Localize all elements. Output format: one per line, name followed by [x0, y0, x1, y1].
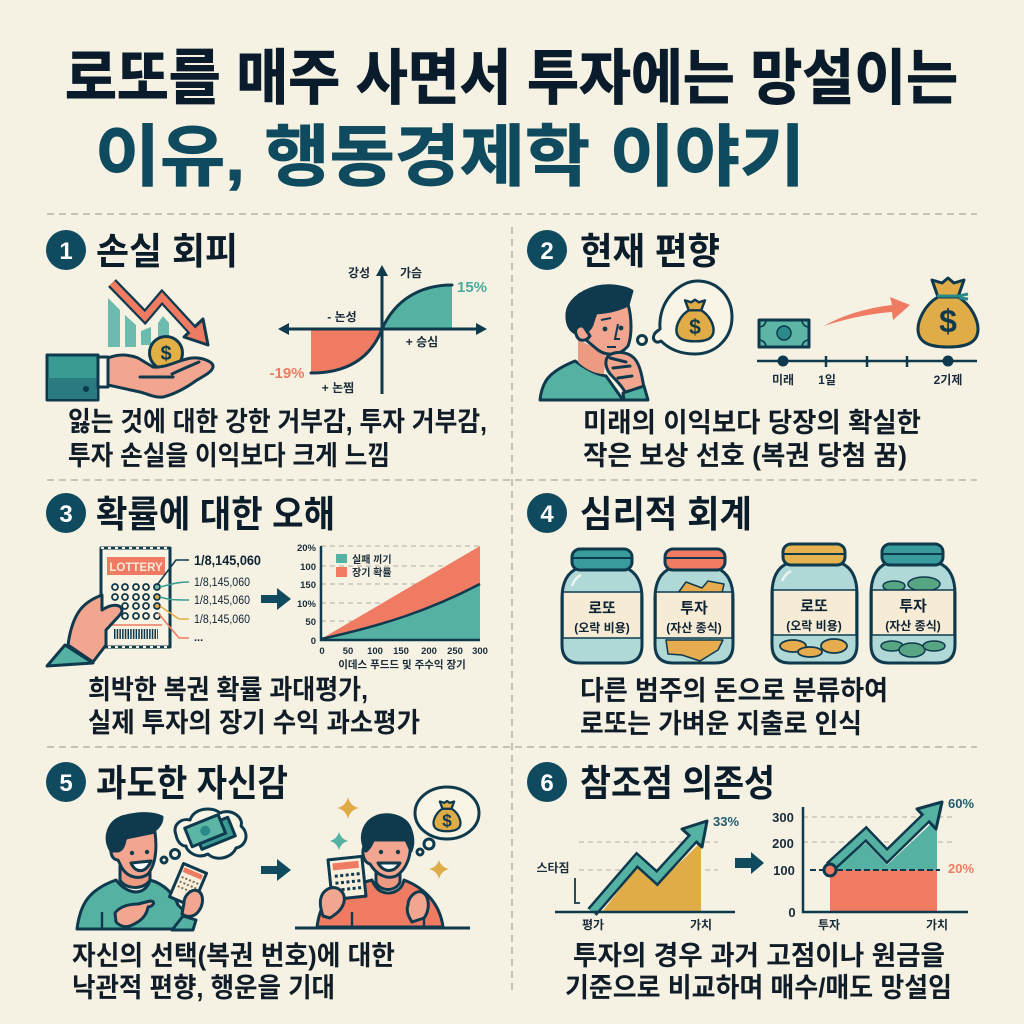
body text 5: 자신의 선택(복권 번호)에 대한 [72, 941, 395, 971]
heading 2: 현재 편향 [580, 231, 720, 272]
number badge 5: 5 [59, 770, 73, 797]
chart: lottery reference: 33% [713, 814, 739, 829]
heading 4: 심리적 회계 [580, 494, 752, 535]
number badge 3 [46, 493, 86, 533]
heading 3: 확률에 대한 오해 [96, 494, 335, 535]
chart: value function: -19% [269, 365, 305, 382]
chart: area chart: 20% [297, 543, 317, 554]
icon: jar 투자 teal lid with leaves: (자산 종식) [885, 619, 941, 633]
number badge 4 [527, 493, 567, 533]
annotation: probability labels [157, 553, 261, 644]
chart: area chart: 50 [343, 646, 353, 657]
title: 이유, 행동경제학 이야기 [95, 120, 805, 195]
body text 4: 다른 범주의 돈으로 분류하여 [580, 676, 888, 706]
icon: jar 투자 coral lid: (자산 종식) [666, 621, 722, 635]
icon: jar 로또 gold lid: 로또 [800, 598, 828, 615]
chart: value function [269, 265, 487, 395]
icon: falling bars and arrow [108, 283, 208, 347]
heading 5: 과도한 자신감 [96, 763, 288, 804]
body text 5 [72, 941, 395, 1003]
icon: sparkles [330, 797, 449, 879]
chart: investment reference: 300 [772, 810, 794, 825]
body text 1: 투자 손실을 이익보다 크게 느낌 [68, 441, 390, 471]
chart: timeline [757, 356, 977, 387]
body text 6 [565, 941, 952, 1003]
annotation: probability labels: 1/8,145,060 [194, 595, 250, 607]
chart: area chart: 150 [393, 646, 409, 657]
annotation: probability labels: 1/8,145,060 [194, 553, 261, 568]
body text 1 [68, 407, 487, 471]
arrow [735, 852, 764, 874]
chart: area chart: 10% [297, 599, 317, 610]
chart: value function: 15% [457, 279, 487, 296]
panel: 손실 회피 [46, 230, 487, 471]
icon: small banknote [759, 320, 809, 347]
panel: 과도한 자신감 [46, 762, 479, 1003]
icon: big money bag [918, 278, 978, 347]
panel: 참조점 의존성 [527, 762, 974, 1003]
chart: investment reference: 0 [788, 905, 796, 920]
annotation: probability labels: 1/8,145,060 [194, 577, 250, 589]
number badge 4: 4 [540, 501, 554, 528]
arrow [261, 588, 291, 610]
icon: jar 투자 teal lid with leaves [871, 544, 955, 663]
chart: timeline: 1일 [818, 373, 836, 387]
icon: lottery ticket in hand [47, 548, 170, 666]
title [65, 45, 958, 195]
chart: value function: - 논성 [327, 310, 357, 324]
body text 2: 미래의 이익보다 당장의 확실한 [583, 408, 921, 438]
icon: thought bubble money bag: $ [442, 811, 452, 830]
icon: cheering man with ticket [295, 815, 470, 928]
panel: 확률에 대한 오해 [46, 493, 488, 738]
chart: area chart [297, 543, 488, 671]
chart: area chart: 0 [319, 646, 325, 657]
chart: area chart: 장기 확률 [352, 566, 392, 579]
body text 4: 로또는 가벼운 지출로 인식 [580, 709, 862, 739]
chart: lottery reference: 스타짐 [536, 861, 570, 875]
number badge 1: 1 [59, 238, 73, 265]
body text 3 [88, 675, 420, 738]
arrow: coral to reward [824, 297, 910, 326]
chart: area chart: 100 [367, 646, 383, 657]
panel: 심리적 회계 [527, 493, 955, 739]
body text 2 [583, 408, 921, 471]
body text 5: 낙관적 편향, 행운을 기대 [72, 973, 335, 1003]
body text 1: 잃는 것에 대한 강한 거부감, 투자 거부감, [68, 407, 487, 437]
annotation: probability labels: 1/8,145,060 [194, 614, 250, 626]
chart: area chart: 300 [472, 646, 488, 657]
icon: thinking man [540, 286, 648, 400]
chart: value function: 가슴 [400, 265, 422, 280]
number badge 1 [46, 230, 86, 270]
chart: lottery reference: 가치 [690, 917, 712, 932]
body text 4 [580, 676, 888, 739]
icon: thought bubble with money bag [638, 281, 732, 354]
chart: timeline: 미래 [772, 372, 794, 387]
body text 6: 투자의 경우 과거 고점이나 원금을 [573, 941, 945, 971]
icon: thought bubble money bag [415, 787, 479, 855]
icon: jar 투자 coral lid: 투자 [680, 600, 708, 617]
chart: investment reference: 200 [772, 836, 794, 851]
icon: man pointing at ticket [77, 814, 207, 930]
title: 로또를 매주 사면서 투자에는 망설이는 [65, 45, 958, 112]
annotation: probability labels: ... [194, 632, 203, 644]
number badge 3: 3 [59, 501, 73, 528]
chart: value function: + 논찜 [322, 381, 354, 395]
chart: investment reference: 투자 [818, 918, 840, 932]
chart: investment reference: 100 [773, 863, 795, 878]
icon: jar 투자 coral lid [655, 549, 733, 663]
icon: hand holding coin: $ [160, 343, 172, 365]
number badge 6: 6 [540, 770, 554, 797]
number badge 6 [527, 762, 567, 802]
chart: area chart: 실패 끼기 [352, 553, 392, 566]
icon: big money bag: $ [939, 303, 957, 339]
chart: area chart: 100 [300, 562, 316, 573]
chart: timeline: 2기제 [934, 372, 962, 387]
icon: jar 투자 teal lid with leaves: 투자 [899, 598, 927, 615]
icon: jar 로또 teal lid: (오락 비용) [574, 621, 630, 635]
icon: lottery ticket in hand: LOTTERY [109, 562, 163, 574]
icon: thought bubble with money bag: $ [689, 316, 701, 339]
body text 3: 실제 투자의 장기 수익 과소평가 [88, 708, 420, 738]
chart: area chart: 200 [421, 646, 437, 657]
icon: jar 로또 gold lid: (오락 비용) [786, 619, 842, 633]
chart: lottery reference: 평가 [582, 917, 604, 932]
body text 6: 기준으로 비교하며 매수/매도 망설임 [565, 973, 952, 1003]
body text 2: 작은 보상 선호 (복권 당첨 꿈) [583, 441, 907, 471]
chart: lottery reference [536, 814, 739, 932]
chart: investment reference: 가치 [926, 917, 948, 932]
heading 6: 참조점 의존성 [580, 763, 775, 804]
chart: area chart: 250 [447, 646, 463, 657]
chart: investment reference: 60% [948, 796, 974, 811]
icon: jar 로또 teal lid: 로또 [588, 600, 616, 617]
chart: area chart: 0 [311, 636, 316, 647]
chart: area chart: 50 [305, 617, 316, 628]
panel: 현재 편향 [527, 230, 978, 471]
icon: thought cloud with banknotes [161, 809, 246, 863]
arrow [261, 859, 291, 881]
icon: jar 로또 gold lid [772, 544, 857, 663]
body text 3: 희박한 복권 확률 과대평가, [88, 675, 368, 705]
icon: hand holding coin [47, 336, 213, 400]
icon: jar 로또 teal lid [562, 549, 642, 663]
chart: value function: 강성 [348, 266, 370, 280]
number badge 5 [46, 762, 86, 802]
number badge 2: 2 [540, 238, 554, 265]
chart: investment reference [772, 796, 974, 932]
heading 1: 손실 회피 [96, 231, 238, 272]
chart: area chart: 이데스 푸드드 및 주수익 장기 [338, 658, 466, 671]
chart: value function: + 승심 [406, 335, 438, 349]
chart: investment reference: 20% [948, 861, 974, 876]
chart: area chart: 150 [300, 580, 316, 591]
number badge 2 [527, 230, 567, 270]
